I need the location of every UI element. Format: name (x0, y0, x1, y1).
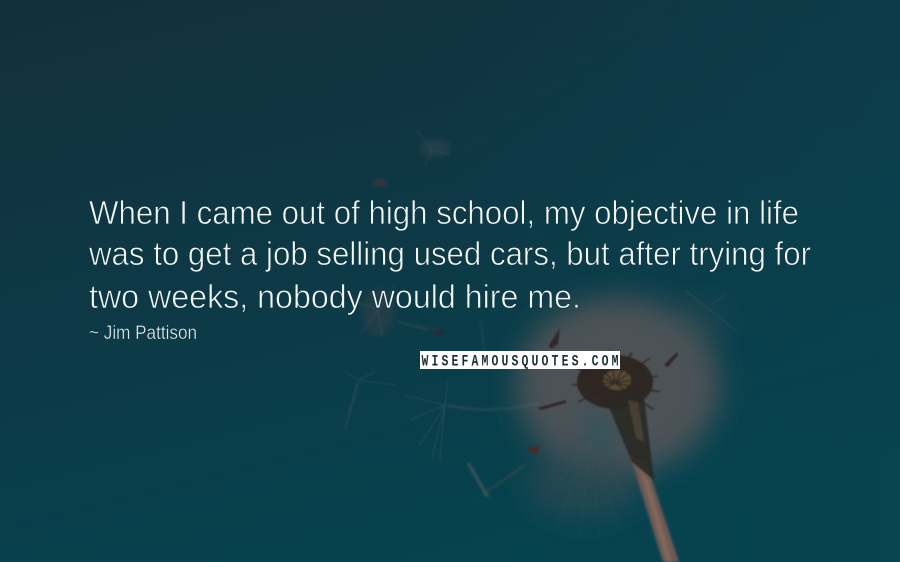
quote line 2: was to get a job selling used cars, but after trying for (88, 236, 811, 273)
quote line 3: two weeks, nobody would hire me. (89, 279, 581, 316)
dandelion seed head (516, 297, 728, 562)
attribution: ~ Jim Pattison (89, 323, 197, 344)
quote text (88, 195, 811, 316)
blurred seed puff (516, 297, 728, 518)
fine bristles at base of the puff (530, 440, 635, 540)
watermark badge: WISEFAMOUSQUOTES.COM (422, 354, 618, 371)
dandelion stem (630, 455, 679, 562)
dark seed core (572, 350, 660, 480)
drifting seeds (345, 130, 735, 497)
quote line 1: When I came out of high school, my objective in life (89, 195, 799, 232)
